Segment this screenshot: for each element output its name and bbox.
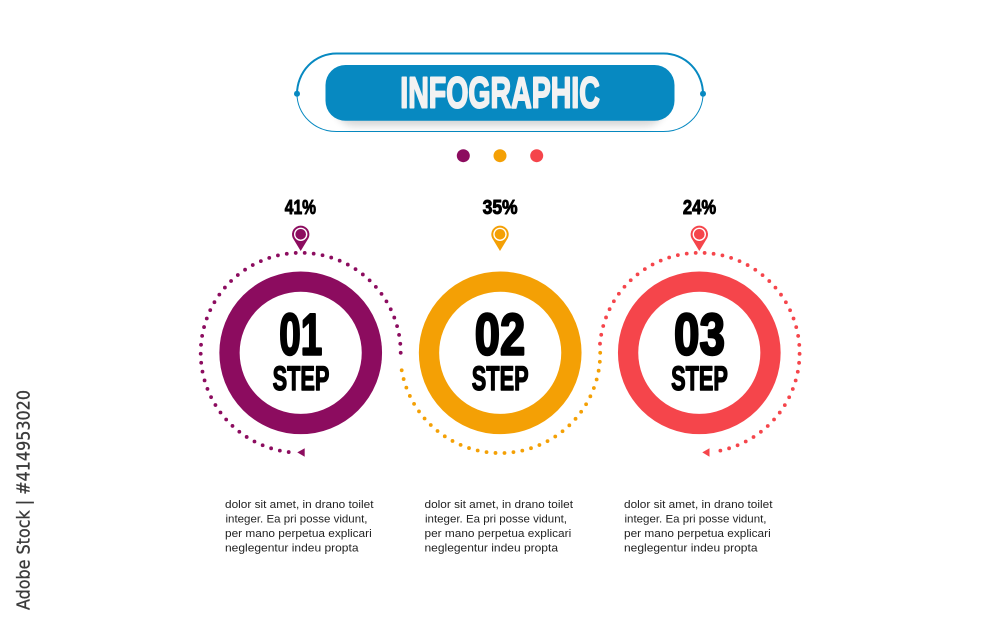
description: dolor sit amet, in drano toilet: [225, 499, 374, 511]
percentage 41%: 41%: [285, 196, 316, 219]
dotted arc: [401, 353, 600, 453]
description: integer. Ea pri posse vidunt,: [425, 513, 567, 525]
description: per mano perpetua explicari: [624, 528, 771, 540]
description: dolor sit amet, in drano toilet: [424, 499, 574, 511]
banner pill: [326, 65, 674, 121]
stock id text: Adobe Stock | #414953020: [14, 390, 34, 610]
ring: [230, 282, 372, 424]
ring: [429, 282, 571, 424]
step number: 01: [279, 302, 322, 368]
percentage 24%: 24%: [683, 196, 716, 219]
step label: STEP: [671, 360, 728, 398]
step number: 03: [674, 302, 725, 368]
percentage 35%: 35%: [483, 196, 518, 219]
icon: pin: [491, 226, 509, 251]
panel: step 2: [401, 196, 600, 555]
step number: 02: [475, 302, 525, 368]
description: integer. Ea pri posse vidunt,: [226, 513, 368, 525]
description: per mano perpetua explicari: [424, 528, 571, 540]
banner outline: [294, 54, 706, 132]
description: neglegentur indeu propta: [225, 543, 359, 555]
description: dolor sit amet, in drano toilet: [624, 499, 773, 511]
title: INFOGRAPHIC: [400, 69, 600, 118]
description: [225, 499, 374, 555]
description: neglegentur indeu propta: [424, 543, 559, 555]
legend dots: [457, 149, 543, 162]
step label: STEP: [472, 360, 529, 398]
panel: step 1: [201, 196, 401, 555]
icon: pin: [292, 226, 309, 251]
description: [624, 499, 773, 555]
icon: pin: [691, 226, 708, 251]
description: neglegentur indeu propta: [624, 543, 758, 555]
description: per mano perpetua explicari: [225, 528, 372, 540]
panel: step 3: [600, 196, 800, 555]
description: integer. Ea pri posse vidunt,: [624, 513, 766, 525]
ring: [628, 282, 770, 424]
description: [424, 499, 574, 555]
title banner: [294, 54, 706, 132]
dotted arc with arrow: [201, 253, 401, 457]
step label: STEP: [273, 360, 329, 398]
dotted arc with arrow: [600, 253, 800, 457]
